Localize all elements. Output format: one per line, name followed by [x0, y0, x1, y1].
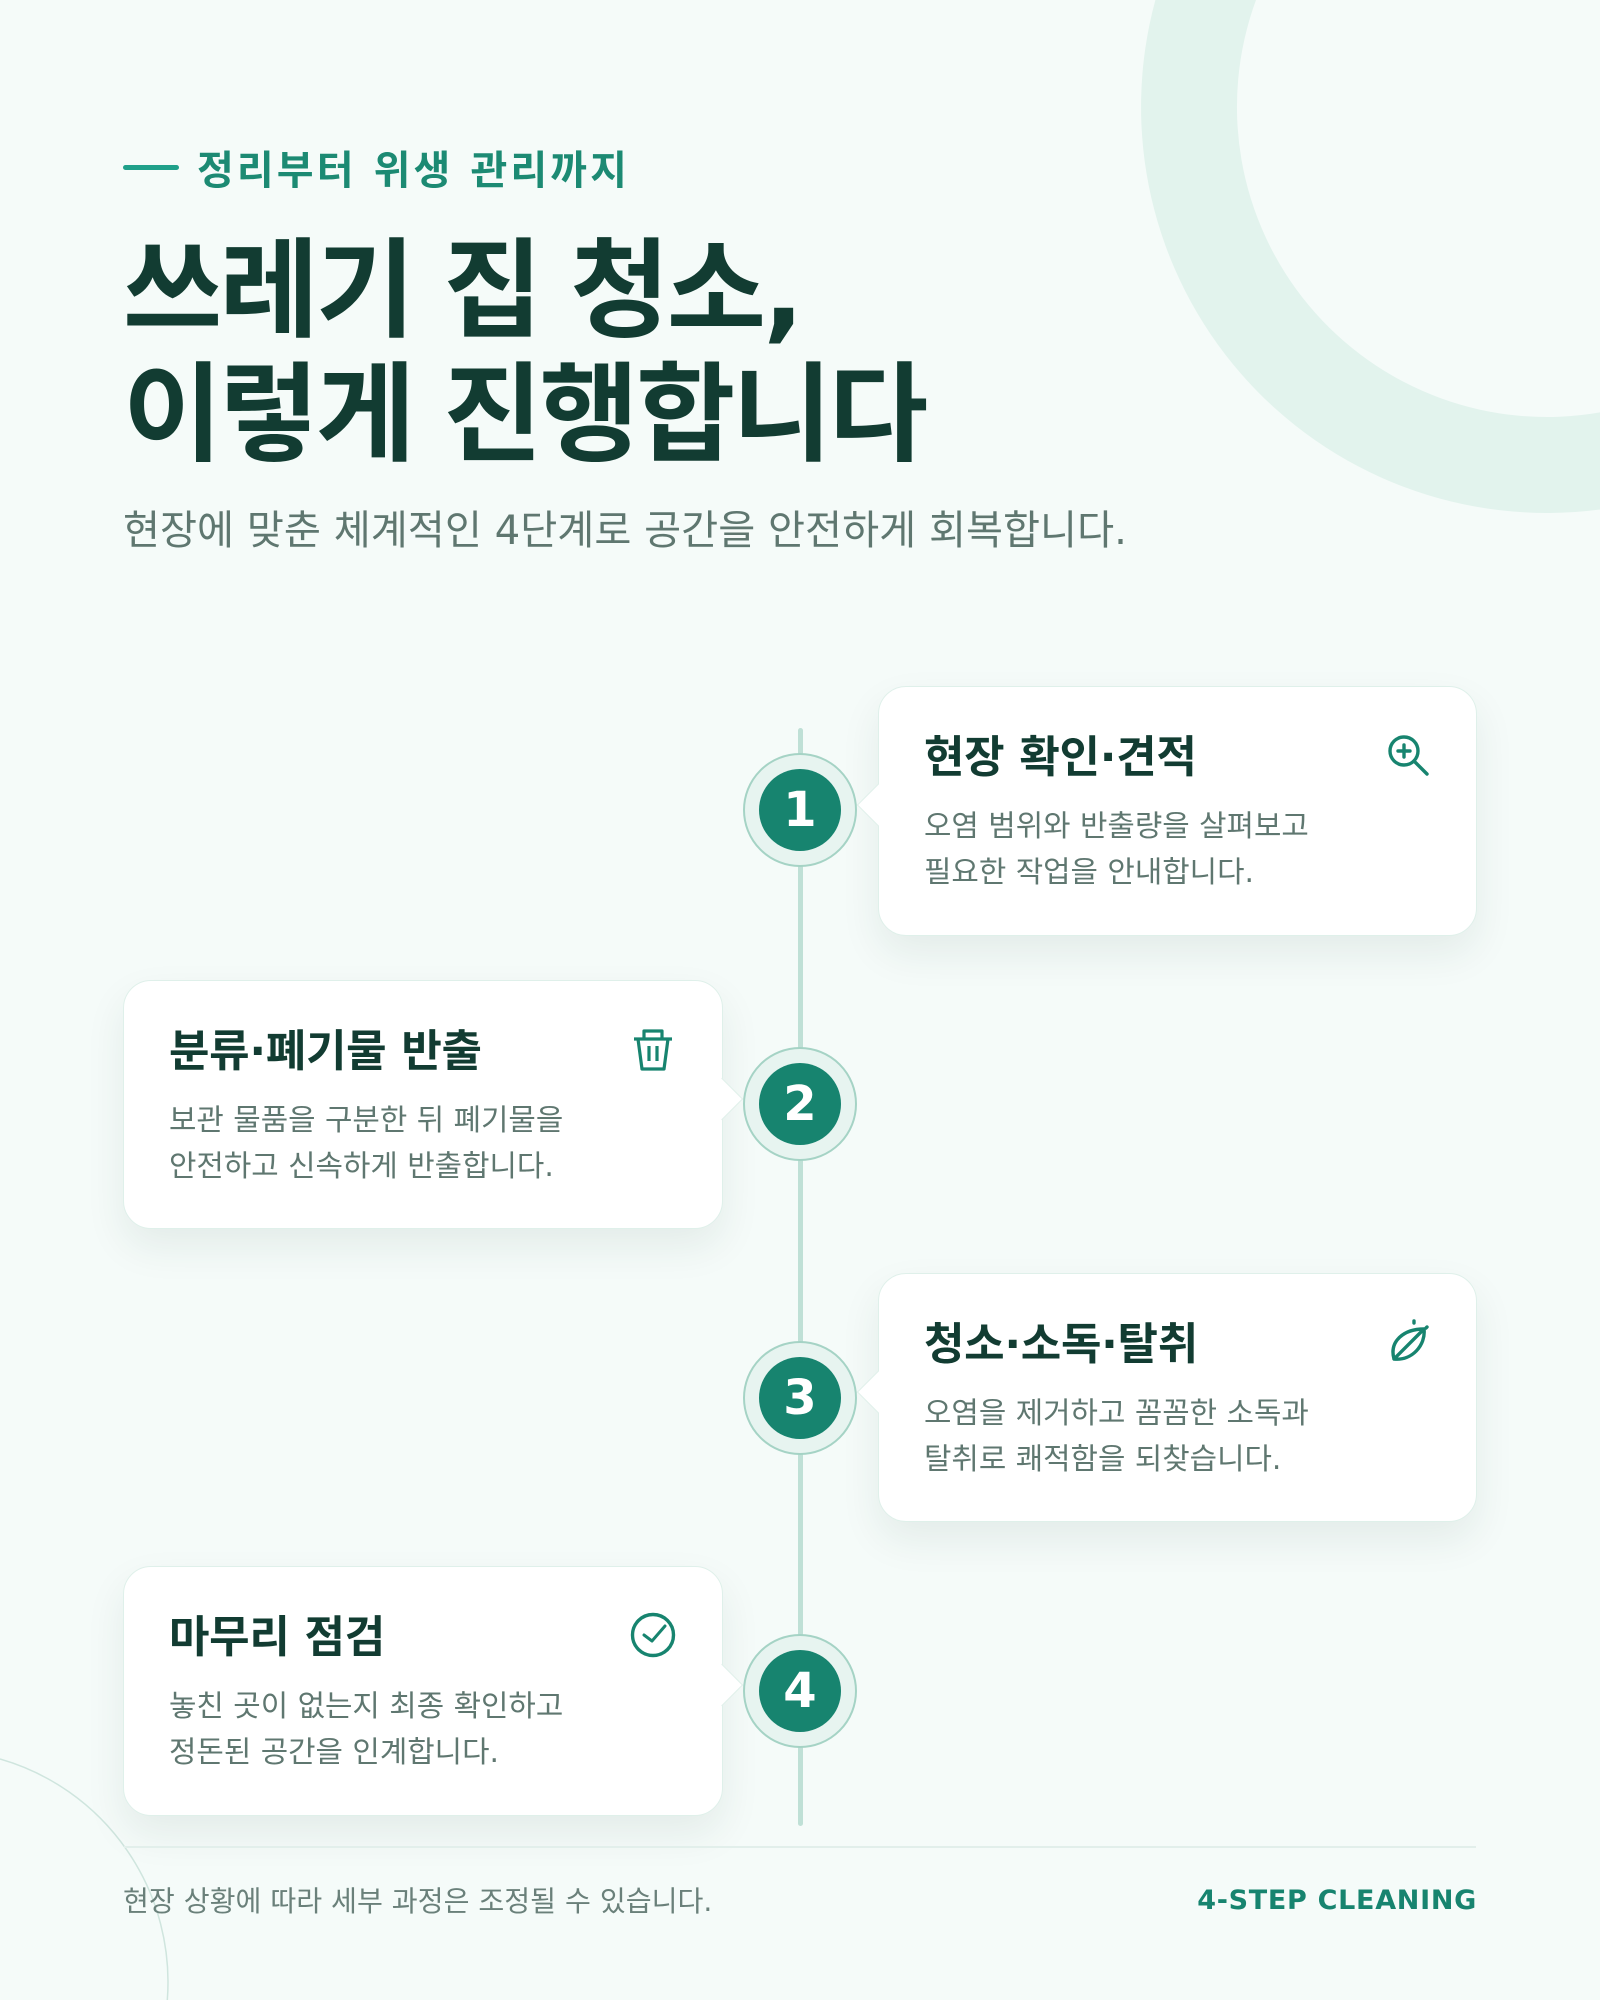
- title: 쓰레기 집 청소,: [123, 229, 801, 354]
- step 2 description: [169, 1102, 563, 1184]
- step 3 description: 오염을 제거하고 꼼꼼한 소독과: [924, 1396, 1309, 1430]
- step 4 number: 4: [783, 1663, 817, 1719]
- panel: step 3 card: [878, 1272, 1477, 1522]
- step 1 number: 1: [783, 782, 817, 838]
- icon: check circle: [630, 1612, 676, 1658]
- footer rule: [124, 1846, 1476, 1848]
- step 2 number: [743, 1047, 857, 1161]
- step 2 description: 안전하고 신속하게 반출합니다.: [169, 1148, 554, 1184]
- step 2 number: 2: [783, 1076, 817, 1132]
- icon: trash can: [634, 1029, 672, 1071]
- step 3 heading: 청소·소독·탈취: [924, 1318, 1198, 1370]
- step 3 description: 탈취로 쾌적함을 되찾습니다.: [924, 1442, 1281, 1476]
- subtitle: 현장에 맞춘 체계적인 4단계로 공간을 안전하게 회복합니다.: [123, 508, 1127, 554]
- footer note: 현장 상황에 따라 세부 과정은 조정될 수 있습니다.: [123, 1885, 712, 1918]
- title: [123, 229, 926, 478]
- panel: step 4 card: [123, 1566, 723, 1816]
- step 4 heading: 마무리 점검: [169, 1612, 385, 1663]
- icon: leaf: [1391, 1319, 1429, 1361]
- step 3 description: [924, 1396, 1309, 1476]
- eyebrow dash: [123, 165, 179, 170]
- step 1 description: 필요한 작업을 안내합니다.: [924, 855, 1254, 890]
- icon: magnifier: [1388, 735, 1429, 776]
- title: 이렇게 진행합니다: [123, 353, 925, 478]
- step 1 description: [924, 809, 1309, 890]
- eyebrow text: 정리부터 위생 관리까지: [197, 148, 630, 194]
- step 2 description: 보관 물품을 구분한 뒤 폐기물을: [169, 1102, 563, 1138]
- timeline line: [798, 728, 803, 1826]
- step 1 heading: 현장 확인·견적: [924, 732, 1197, 783]
- step 4 number: [743, 1634, 857, 1748]
- step 1 number: [743, 753, 857, 867]
- panel: step 1 card: [878, 686, 1477, 936]
- step 1 description: 오염 범위와 반출량을 살펴보고: [924, 809, 1309, 844]
- footer brand label: 4-STEP CLEANING: [1197, 1885, 1477, 1916]
- step 4 description: [169, 1689, 563, 1770]
- step 3 number: 3: [783, 1370, 817, 1426]
- step 2 heading: 분류·폐기물 반출: [169, 1026, 482, 1076]
- step 3 number: [743, 1341, 857, 1455]
- step 4 description: 정돈된 공간을 인계합니다.: [169, 1735, 499, 1770]
- panel: step 2 card: [123, 980, 723, 1229]
- step 4 description: 놓친 곳이 없는지 최종 확인하고: [169, 1689, 563, 1724]
